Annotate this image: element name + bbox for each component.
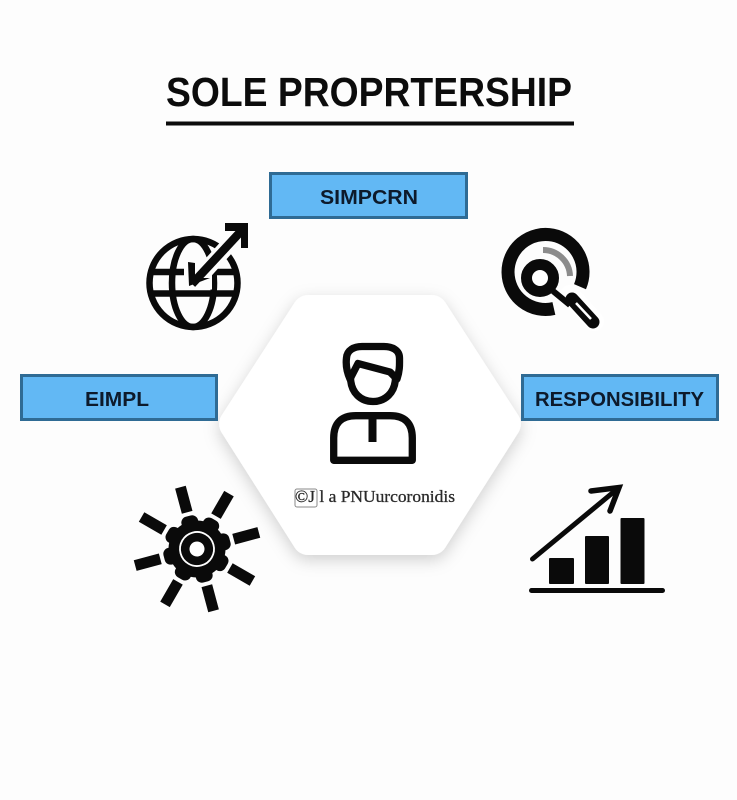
central hexagon panel bbox=[235, 311, 505, 539]
icon: person bbox=[334, 346, 412, 460]
caption: ©J l a PNUurcoronidis bbox=[295, 487, 455, 506]
icon: magnifier bbox=[508, 234, 594, 322]
title: SOLE PROPRTERSHIP bbox=[166, 69, 572, 115]
label: left: EIMPL bbox=[85, 389, 149, 411]
icon: globe with arrow bbox=[150, 223, 248, 327]
label: right: RESPONSIBILITY bbox=[535, 389, 705, 411]
label: right bbox=[522, 376, 718, 420]
label: top bbox=[270, 174, 466, 218]
label: left bbox=[22, 376, 216, 420]
icon: growth bar chart bbox=[532, 488, 662, 590]
label: top: SIMPCRN bbox=[320, 187, 418, 209]
icon: gear with rays bbox=[119, 471, 275, 627]
